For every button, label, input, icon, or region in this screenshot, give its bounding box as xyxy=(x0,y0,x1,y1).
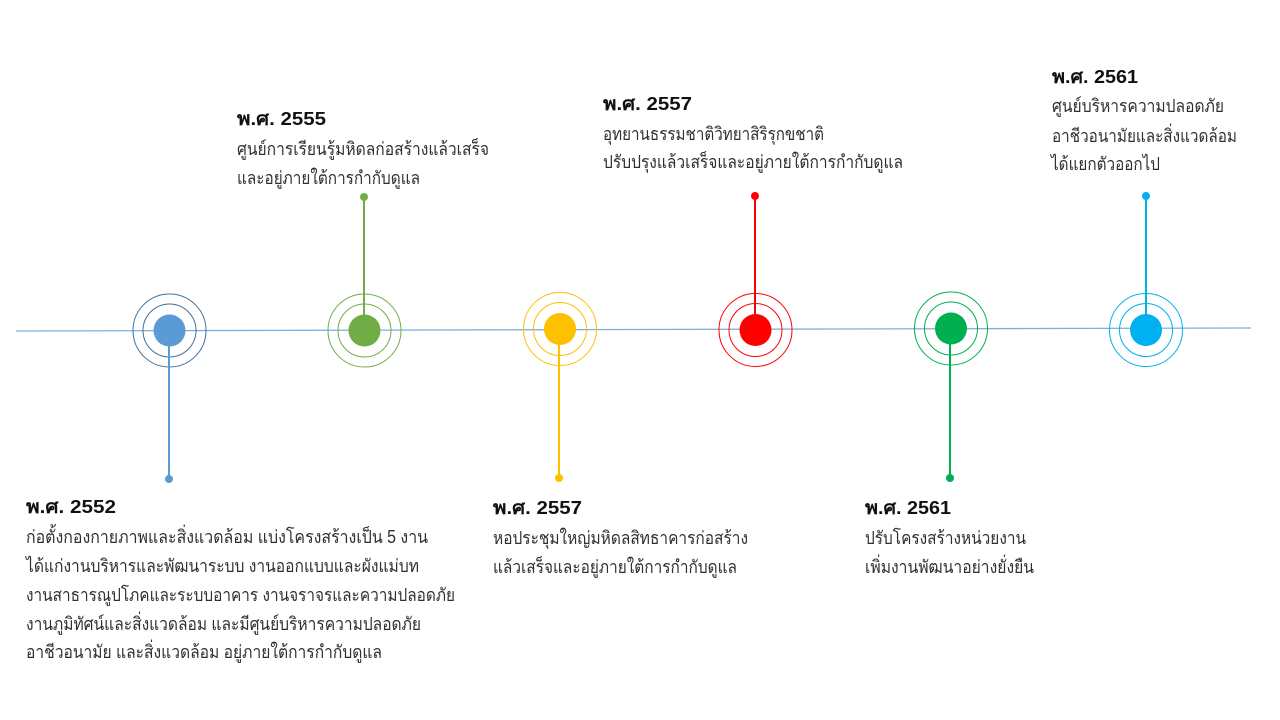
text block: 2557 hall xyxy=(493,497,748,578)
milestone node: 2561 safety centre xyxy=(1110,192,1182,366)
text block: 2552 xyxy=(24,496,455,663)
text block: 2557 park xyxy=(603,93,903,173)
text block: 2561 restructure xyxy=(865,497,1034,577)
text block: 2555: ศูนย์การเรียนรู้มหิดลก่อสร้างแล้วเสร็จ xyxy=(237,137,489,160)
timeline axis xyxy=(16,328,1251,331)
text block: 2561 safety centre: ได้แยกตัวออกไป xyxy=(1049,153,1160,174)
text block: 2557 park: อุทยานธรรมชาติวิทยาสิริรุกขชาติ xyxy=(603,124,824,145)
text block: 2561 safety centre: อาชีวอนามัยและสิ่งแวดล้อม xyxy=(1052,123,1237,146)
milestone node: 2555 xyxy=(328,193,401,367)
text block: 2555: พ.ศ. 2555 xyxy=(237,108,326,129)
text block: 2557 hall: พ.ศ. 2557 xyxy=(493,497,582,518)
milestone node: 2561 restructure xyxy=(914,292,988,482)
text block: 2552: อาชีวอนามัย และสิ่งแวดล้อม อยู่ภายใต้การกำกับดูแล xyxy=(26,639,382,663)
milestone node: 2557 hall xyxy=(524,292,596,482)
text block: 2561 safety centre: พ.ศ. 2561 xyxy=(1052,66,1138,87)
text block: 2555: และอยู่ภายใต้การกำกับดูแล xyxy=(237,167,420,189)
text block: 2552: งานภูมิทัศน์และสิ่งแวดล้อม และมีศูนย์บริหารความปลอดภัย xyxy=(26,611,421,635)
text block: 2561 restructure: เพิ่มงานพัฒนาอย่างยั่งยืน xyxy=(865,554,1034,577)
text block: 2552: ก่อตั้งกองกายภาพและสิ่งแวดล้อม แบ่งโครงสร้างเป็น 5 งาน xyxy=(26,524,428,547)
milestone node: 2552 xyxy=(133,294,206,483)
text block: 2557 hall: แล้วเสร็จและอยู่ภายใต้การกำกับดูแล xyxy=(493,555,737,578)
text block: 2557 hall: หอประชุมใหญ่มหิดลสิทธาคารก่อสร้าง xyxy=(493,527,748,549)
text block: 2561 restructure: ปรับโครงสร้างหน่วยงาน xyxy=(865,527,1026,548)
text block: 2561 safety centre xyxy=(1049,66,1237,174)
text block: 2555 xyxy=(237,108,489,189)
text block: 2552: งานสาธารณูปโภคและระบบอาคาร งานจราจรและความปลอดภัย xyxy=(26,584,455,606)
text block: 2561 restructure: พ.ศ. 2561 xyxy=(865,497,951,518)
text block: 2561 safety centre: ศูนย์บริหารความปลอดภัย xyxy=(1052,96,1224,117)
text block: 2557 park: ปรับปรุงแล้วเสร็จและอยู่ภายใต้การกำกับดูแล xyxy=(603,150,903,173)
text block: 2557 park: พ.ศ. 2557 xyxy=(603,93,692,114)
text block: 2552: ได้แก่งานบริหารและพัฒนาระบบ งานออกแบบและผังแม่บท xyxy=(24,555,419,576)
text block: 2552: พ.ศ. 2552 xyxy=(26,496,116,517)
milestone node: 2557 park xyxy=(719,192,792,366)
